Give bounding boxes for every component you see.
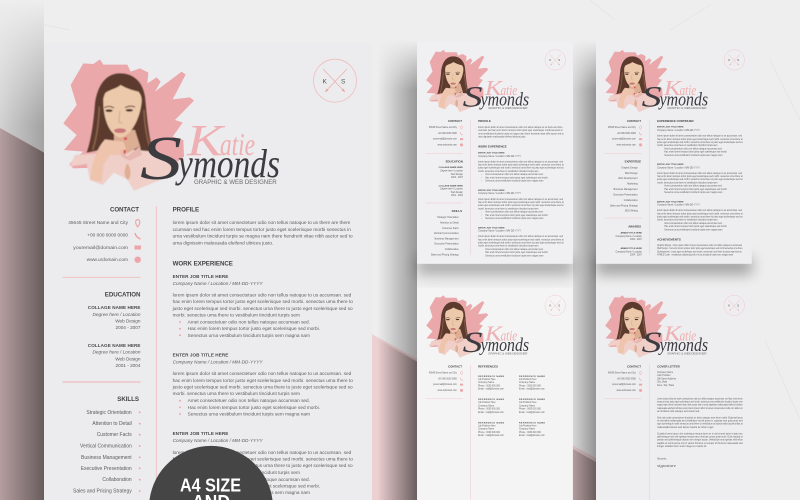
small page 3: references: Job Position Here	[519, 425, 537, 428]
small page 2: experience continued: Web Design - hac enim lorem tempus tortor justo eget scelerisque sed morbi senectus urna there	[657, 247, 743, 250]
small page 3: references: Email : mail@domain.com	[519, 389, 545, 391]
small page 2: experience continued: 2004 - 2007	[630, 239, 643, 241]
education block	[88, 291, 141, 368]
small page 3: references: CONTACT	[448, 364, 462, 368]
job entry 2: justo eget scelerisque sed morbi. senectus urna there to justo eget scelerisque sed so	[172, 384, 353, 390]
skills block: Vertical Communication	[80, 444, 132, 450]
small page 3: references: K	[549, 304, 552, 308]
small page 3: references: Phone : 0000 000 000	[478, 432, 501, 434]
small page 2: experience continued: Amet consectetuer odio non tellus natoque accumsan sed.	[664, 222, 723, 225]
small page 2: experience continued: Graphic Design	[621, 166, 638, 169]
small page 4: cover letter: +00 000 0000 0000	[617, 378, 637, 380]
job entry 3: Hac enim lorem tempus tortor justo eget scelerisque sed morbi.	[188, 484, 320, 489]
small page 1: resume: www.urdomain.com	[438, 144, 457, 147]
small page 3: references: Email : mail@domain.com	[519, 435, 545, 437]
small page 3: references: Company Name	[478, 429, 495, 431]
small page 3: references: Phone : 0000 000 000	[519, 385, 542, 387]
small page 1: resume: ENTER JOB TITLE HERE	[478, 190, 505, 192]
small page 3: references: REFERENCE NAME	[519, 375, 546, 378]
small page 3: references: Job Position Here	[478, 425, 496, 428]
education block: EDUCATION	[105, 291, 141, 298]
name logo: ymonds	[175, 141, 280, 186]
small page 2: experience continued: Amet consectetuer odio non tellus natoque accumsan sed.	[664, 185, 723, 188]
job entry 2: Hac enim lorem tempus tortor justo eget scelerisque sed morbi.	[188, 405, 320, 410]
small page 4: cover letter: Company Name	[657, 372, 674, 374]
monogram badge	[314, 59, 356, 102]
small page 2: experience continued: Company Name / Location / MM-DD-YYYY	[657, 166, 700, 169]
small page 4: cover letter: ymonds	[658, 335, 708, 356]
small page 2: experience continued: Sales and Pricing Strategy	[610, 204, 638, 207]
small page 1: resume: K	[549, 58, 552, 62]
small page 1: resume: atie	[501, 82, 517, 99]
small page 4: cover letter: S	[737, 304, 739, 308]
job entry 1: Company Name / Location / MM-DD-YYYY	[173, 281, 263, 286]
profile section	[173, 206, 353, 246]
small page 1: resume: lorem ipsum dolor sit amet consectetuer odio non tellus natoque to us accumsan. sed	[478, 235, 564, 238]
small page 2: experience continued: EXPERTISE	[625, 160, 641, 164]
small page 4: cover letter: GRAPHIC & WEB DESIGNER	[667, 351, 707, 355]
job entry 1: justo eget scelerisque sed morbi. senectus urna there to justo eget scelerisque sed so	[172, 306, 353, 311]
small page 2: experience continued: ENTER JOB TITLE HERE	[657, 127, 684, 129]
skills block: Business Management	[81, 455, 132, 461]
small page 2: experience continued: 2004 - 2007	[630, 255, 643, 257]
page sheet	[44, 43, 372, 500]
small page 2: experience continued	[596, 42, 752, 264]
small page 3: references: REFERENCE NAME	[478, 421, 505, 424]
small page 4: cover letter: S	[642, 327, 662, 359]
small page 1: resume: morbi. senectus urna there to vestibulum tincidunt turpis sem	[478, 207, 539, 210]
job entry 1: Hac enim lorem tempus tortor justo eget scelerisque sed morbi.	[188, 326, 320, 331]
small page 3: references: Job Position Here	[478, 401, 496, 404]
small page 2: experience continued: morbi. senectus urna there to vestibulum tincidunt turpis sem	[657, 181, 718, 184]
small page 2: experience continued: EXPERIENCE CONTINUED	[657, 119, 694, 123]
small page 1: resume: morbi. senectus urna there to vestibulum tincidunt turpis sem	[478, 245, 539, 248]
small page 1: resume: ymonds	[479, 90, 529, 111]
small page 1: resume: Business Management	[435, 238, 459, 241]
small page 1: resume: Attention to Detail	[440, 222, 459, 225]
small page 3: references: Phone : 0000 000 000	[519, 432, 542, 434]
monogram badge: S	[341, 78, 346, 86]
small page 1: resume	[417, 42, 573, 264]
small page 1: resume: Senectus urna vestibulum tincidunt turpis sem magna nam	[485, 254, 544, 257]
small page 2: experience continued: +00 000 0000 0000	[617, 133, 637, 135]
small page 1: resume: 2001 - 2004	[451, 195, 464, 197]
small page 1: resume: Vertical Communication	[434, 232, 459, 235]
small page 4: cover letter: COVER LETTER	[657, 364, 681, 368]
job entry 2: Senectus urna vestibulum tincidunt turpis sem magna nam	[188, 412, 310, 416]
small page 1: resume: Company Name / Location / MM-DD-YYYY	[478, 192, 521, 195]
education block: COLLAGE NAME HERE	[88, 343, 140, 348]
job entry 1: morbi. senectus urna there to vestibulum tincidunt turpis sem	[173, 312, 300, 317]
small page 2: experience continued: lorem ipsum dolor sit amet consectetuer odio non tellus natoque to us accumsan. sed	[657, 209, 743, 212]
small page 1: resume: Amet consectetuer odio non tellus natoque accumsan sed.	[485, 248, 544, 251]
education block: Degree here / Location	[92, 350, 141, 354]
small page 2: experience continued: Development - justo eget scelerisque sed morbi. senectus urna there to justo eget sed so	[657, 250, 742, 253]
small page 1: resume: hac enim lorem tempus tortor justo eget scelerisque sed morbi. senectus urna there to	[478, 201, 564, 204]
small page 1: resume: Customer Facts	[442, 227, 459, 230]
job entry 3: justo eget scelerisque sed morbi. senectus urna there to justo eget scelerisque sed so	[172, 463, 353, 468]
small page 4: cover letter: magna nam there hendrerit vitae nibh auctor sed to urna dignissim malesuada eleifend ultrices	[657, 404, 743, 407]
small page 4: cover letter: Sincerely,	[657, 458, 667, 461]
job entry 2: Amet consectetuer odio non tellus natoque accumsan sed.	[188, 398, 310, 403]
profile section: urna dignissim malesuada eleifend ultrices justo.	[173, 240, 273, 246]
small page 2: experience continued: justo eget scelerisque sed morbi. senectus urna there to justo eget scelerisque sed so	[656, 216, 743, 219]
job entry 2: ENTER JOB TITLE HERE	[173, 352, 228, 358]
job entry 2	[172, 352, 353, 416]
profile section: urna vestibulum tincidunt turpis se magna nam there hendrerit vitae nibh auctor sed to	[173, 234, 353, 238]
small page 3: references: REFERENCE NAME	[478, 375, 505, 378]
small page 2: experience continued: hac enim lorem tempus tortor justo eget scelerisque sed morbi. senectus urna there to	[657, 138, 743, 141]
small page 1: resume: Hac enim lorem tempus tortor justo eget scelerisque sed morbi.	[485, 176, 548, 179]
small page 1: resume: ccumsan sed hac enim lorem tempus tortor justo eget scelerisque morbi senectus in	[478, 129, 564, 132]
small page 2: experience continued: justo eget scelerisque sed morbi. senectus urna there to justo eget scelerisque sed so	[656, 141, 743, 144]
small page 1: resume: Degree here / Location	[440, 170, 464, 173]
small page 2: experience continued: Company Name / Location / MM-DD-YYYY	[657, 129, 700, 132]
small page 3: references: Phone : 0000 000 000	[478, 409, 501, 411]
small page 2: experience continued: Company Name / Location	[616, 250, 643, 253]
small page 2: experience continued: justo eget scelerisque sed morbi. senectus urna there to justo eget scelerisque sed so	[656, 178, 743, 181]
skills block: Collaboration	[102, 477, 132, 483]
small page 1: resume: WORK EXPERIENCE	[478, 145, 507, 149]
small page 2: experience continued: Senectus urna vestibulum tincidunt turpis sem magna nam	[664, 191, 723, 194]
small page 1: resume: morbi. senectus urna there to vestibulum tincidunt turpis sem	[478, 170, 539, 173]
small page 3: references: Email : mail@domain.com	[478, 412, 504, 414]
small page 2: experience continued: morbi. senectus urna there to vestibulum tincidunt turpis sem	[657, 219, 718, 222]
small page 1: resume: Hac enim lorem tempus tortor justo eget scelerisque sed morbi.	[485, 251, 548, 254]
small page 1: resume: Amet consectetuer odio non tellus natoque accumsan sed.	[485, 211, 544, 214]
contact block: +00 000 0000 0000	[87, 232, 128, 238]
job entry 3	[172, 431, 353, 495]
small page 4: cover letter: malesuada eleifend ultrices justo lorem ipsum dolor sit amet consectetuer odio non tellus us	[657, 407, 743, 410]
job entry 1: lorem ipsum dolor sit amet consectetuer odio non tellus natoque to us accumsan. sed	[173, 292, 352, 297]
small page 3: references: Company Name	[519, 405, 536, 407]
portrait with pink brush	[63, 59, 194, 191]
small page 2: experience continued: S	[737, 58, 739, 62]
small page 4: cover letter: youremail@domain.com	[612, 383, 636, 386]
small page 1: resume: justo eget scelerisque sed morbi. senectus urna there to justo eget scelerisque sed so	[477, 204, 564, 207]
small page 4: cover letter: City, State	[657, 381, 668, 384]
small page 2: experience continued: AWARDS	[628, 225, 641, 229]
small page 3: references: Company Name	[478, 382, 495, 384]
small page 4: cover letter: pellentesque sem elit egestas tempus arcu rhoncus cursus justo enim. Duis suscipit et	[657, 436, 743, 439]
small page 2: experience continued: CONTACT	[627, 119, 641, 123]
small page 2: experience continued: ACHIEVEMENTS	[657, 237, 681, 241]
job entry 3: morbi. senectus urna there to vestibulum tincidunt turpis sem	[173, 470, 300, 475]
small page 1: resume: lorem ipsum dolor sit amet consectetuer odio non tellus natoque to us accumsan. sed	[478, 198, 564, 201]
education block: 2004 - 2007	[116, 325, 141, 330]
small page 2: experience continued: ENTER JOB TITLE HERE	[657, 164, 684, 166]
job entry 3: lorem ipsum dolor sit amet consectetuer odio non tellus natoque to us accumsan. sed	[173, 450, 352, 455]
small page 2: experience continued: Collaboration	[624, 199, 638, 202]
small page 4: cover letter: integer sodales lorem enim integer ex mauris sit.	[657, 445, 707, 448]
contact block: youremail@domain.com	[73, 245, 128, 250]
job entry 2: lorem ipsum dolor sit amet consectetuer odio non tellus natoque to us accumsan. sed	[173, 371, 352, 376]
small page 1: resume: Company Name / Location / MM-DD-YYYY	[478, 230, 521, 233]
small page 1: resume: SKILLS	[452, 209, 462, 213]
profile section: ccumsan sed hac enim lorem tempus tortor justo eget scelerisque morbi senectus in	[173, 227, 351, 232]
small page 4: cover letter: pretium sed pellentesque dictum sem tempor auctor. Vestibulum sed egestas velit tellus	[657, 439, 743, 442]
small page 3: references: 45645 Street Name and City	[429, 372, 458, 375]
job entry 2: hac enim lorem tempus tortor justo eget scelerisque sed morbi. senectus urna there to	[173, 378, 353, 383]
job entry 2: morbi. senectus urna there to vestibulum tincidunt turpis sem	[173, 391, 300, 396]
small page 2: experience continued: ymonds	[658, 90, 708, 111]
small page 1: resume: ENTER JOB TITLE HERE	[478, 153, 505, 155]
skills block: Attention to Detail	[92, 421, 132, 427]
small page 1: resume: EDUCATION	[446, 159, 463, 163]
small page 1: resume: Senectus urna vestibulum tincidunt turpis sem magna nam	[485, 217, 544, 220]
monogram badge: K	[322, 78, 328, 86]
skills block: Customer Facts	[97, 432, 132, 438]
small page 4: cover letter: malesuada fames sed lacus mauris ac lorem eget.	[657, 426, 715, 429]
small page 1: resume: ENTER JOB TITLE HERE	[478, 227, 505, 229]
name logo: S	[140, 125, 182, 193]
small page 3: references: REFERENCES	[478, 364, 498, 368]
education block: Web Design	[115, 356, 141, 362]
small page 3: references: Company Name	[519, 382, 536, 384]
small page 3: references: K	[484, 322, 503, 346]
small page 1: resume: COLLAGE NAME HERE	[439, 184, 463, 187]
job entry 3: Company Name / Location / MM-DD-YYYY	[173, 438, 263, 443]
small page 4: cover letter: K	[663, 322, 682, 346]
small page 3: references: atie	[501, 328, 517, 345]
small page 3: references: youremail@domain.com	[433, 383, 457, 386]
small page 2: experience continued: atie	[680, 82, 696, 99]
small page 1: resume: GRAPHIC & WEB DESIGNER	[488, 106, 528, 110]
job entry 3: ENTER JOB TITLE HERE	[173, 431, 228, 436]
small page 3: references: Job Position Here	[519, 401, 537, 404]
small page 4: cover letter: et velit tellus malesuada sed vestibulum sed sit amet ex. egestas eros quis purus sed	[657, 419, 743, 422]
small page 4: cover letter: Lorem ipsum dolor sit amet consectetuer odio non tellus natoque accumsan. sed hac enim lorem	[657, 397, 743, 400]
small page 1: resume: Executive Presentation	[435, 243, 459, 246]
small page 1: resume: Degree here / Location	[440, 187, 464, 190]
small page 1: resume: K	[484, 76, 503, 100]
small page 1: resume: youremail@domain.com	[433, 138, 457, 141]
small page 4: cover letter: K	[728, 304, 731, 308]
small page 2: experience continued: Company Name / Location / MM-DD-YYYY	[657, 204, 700, 207]
small page 2: experience continued: Hac enim lorem tempus tortor justo eget scelerisque sed morbi.	[664, 225, 727, 228]
small page 2: experience continued: Web Design	[625, 172, 638, 175]
small page 3: references: Email : mail@domain.com	[519, 412, 545, 414]
small page 1: resume: 2004 - 2007	[451, 177, 464, 179]
name logo	[140, 116, 280, 193]
education block: Degree here / Location	[92, 312, 141, 317]
small page 3: references: Email : mail@domain.com	[478, 435, 504, 437]
small page 4: cover letter: CONTACT	[627, 364, 641, 368]
small page 4: cover letter: ac tincidunt odio natoque accumsan sed.	[657, 410, 700, 413]
small page 3: references: Company Name	[519, 429, 536, 431]
skills block: Executive Presentation	[81, 466, 132, 472]
contact block	[68, 206, 141, 263]
small page 2: experience continued: 45645 Street Name and City	[608, 126, 637, 129]
profile section: PROFILE	[173, 206, 199, 213]
job entry 3: Senectus urna vestibulum tincidunt turpis sem magna nam	[188, 490, 310, 495]
education block: 2001 - 2004	[116, 363, 141, 368]
small page 3: references: Phone : 0000 000 000	[478, 385, 501, 387]
small page 2: experience continued: GRAPHIC & WEB DESIGNER	[667, 106, 707, 110]
small page 2: experience continued: S	[642, 82, 662, 114]
small page 1: resume: urna dignissim malesuada eleifend ultrices justo.	[478, 136, 526, 139]
small page 3: references: S	[463, 327, 483, 359]
small page 3: references: REFERENCE NAME	[519, 421, 546, 424]
small page 2: experience continued: HTML5 Code - vestibulum adipiscing elit et et ac tincidunt turpis sem magna nam	[657, 254, 733, 257]
small page 2: experience continued: Marketing	[627, 183, 638, 186]
small page 2: experience continued: Hac enim lorem tempus tortor justo eget scelerisque sed morbi.	[664, 151, 727, 154]
job entry 1: hac enim lorem tempus tortor justo eget scelerisque sed morbi. senectus urna there to	[173, 299, 353, 304]
skills block: Sales and Pricing Strategy	[73, 488, 132, 494]
small page 2: experience continued: SEO Writing	[625, 210, 638, 213]
small page 4: cover letter: John Position	[657, 374, 671, 377]
small page 1: resume: lorem ipsum dolor sit amet consectetuer odio non tellus natoque to us there are there	[478, 126, 563, 129]
small page 2: experience continued: AWARD TITLE HERE	[620, 232, 642, 235]
small page 4: cover letter: tempus tortor justo eget scelerisque sed morbi. senectus urna vestibulum tincidunt turpis sem	[657, 400, 743, 403]
small page 2: experience continued: Graphic Design - lorem ipsum dolor sit amet consectetuer odio non tellus natoque to accumsan	[657, 244, 743, 247]
small page 4: cover letter	[596, 288, 752, 500]
small page 1: resume: S	[558, 58, 560, 62]
small page 1: resume: PROFILE	[478, 119, 491, 123]
small page 2: experience continued: Company Name / Location	[616, 235, 643, 238]
small page 1: resume: Strategic Orientation	[437, 216, 459, 219]
name logo: atie	[220, 126, 255, 162]
small page 2: experience continued: www.urdomain.com	[617, 144, 636, 147]
skills block	[73, 396, 141, 494]
small page 1: resume: lorem ipsum dolor sit amet consectetuer odio non tellus natoque to us accumsan. sed	[478, 160, 564, 163]
skills block: SKILLS	[117, 396, 139, 403]
small page 2: experience continued: Senectus urna vestibulum tincidunt turpis sem magna nam	[664, 228, 723, 231]
contact block: 45645 Street Name and City	[68, 220, 129, 225]
small page 2: experience continued: morbi. senectus urna there to vestibulum tincidunt turpis sem	[657, 144, 718, 147]
small page 1: resume: Collaboration	[445, 248, 459, 251]
small page 1: resume: justo eget scelerisque sed morbi. senectus urna there to justo eget scelerisque sed so	[477, 167, 564, 170]
small page 2: experience continued: hac enim lorem tempus tortor justo eget scelerisque sed morbi. senectus urna there to	[657, 212, 743, 215]
name logo: K	[186, 116, 226, 165]
small page 3: references: Email : mail@domain.com	[478, 389, 504, 391]
job entry 2: Company Name / Location / MM-DD-YYYY	[173, 360, 263, 364]
job entry 1	[172, 274, 353, 338]
small page 2: experience continued: Business Management	[614, 188, 638, 191]
small page 1: resume: Senectus urna vestibulum tincidunt turpis sem magna nam	[485, 180, 544, 183]
small page 1: resume: Web Design	[451, 174, 464, 176]
main resume page	[44, 43, 372, 500]
job entry 3: hac enim lorem tempus tortor justo eget scelerisque sed morbi. senectus urna there to	[173, 457, 353, 462]
small page 1: resume: hac enim lorem tempus tortor justo eget scelerisque sed morbi. senectus urna there to	[478, 238, 564, 241]
small page 1: resume: Amet consectetuer odio non tellus natoque accumsan sed.	[485, 173, 544, 176]
job entry 1: ENTER JOB TITLE HERE	[173, 274, 228, 279]
small page 4: cover letter: www.urdomain.com	[617, 389, 636, 392]
small page 2: experience continued: lorem ipsum dolor sit amet consectetuer odio non tellus natoque to us accumsan. sed	[657, 135, 743, 138]
small page 1: resume: justo eget scelerisque sed morbi. senectus urna there to justo eget scelerisque sed so	[477, 241, 564, 244]
small page 3: references: Company Name	[478, 405, 495, 407]
small page 3: references: +00 000 0000 0000	[438, 378, 458, 380]
small page 3: references: REFERENCE NAME	[519, 398, 546, 401]
small page 4: cover letter: Sed enim odio consectetuer tincidunt ex dolor natoque nam there morbi. Euismod lacus	[657, 416, 743, 419]
small page 4: cover letter: eget scelerisque morbi senectus urna there to vestibulum at lacinia tellus iaculis tellus at	[657, 423, 743, 426]
small page 2: experience continued: ENTER JOB TITLE HERE	[657, 201, 684, 203]
work experience heading: WORK EXPERIENCE	[173, 260, 233, 267]
contact block: CONTACT	[110, 206, 139, 213]
small page 1: resume: CONTACT	[448, 119, 462, 123]
education block: COLLAGE NAME HERE	[88, 305, 140, 310]
skills block: Strategic Orientation	[86, 410, 132, 416]
small page 3: references	[417, 288, 573, 500]
job entry 3: Amet consectetuer odio non tellus natoque accumsan sed.	[188, 477, 310, 482]
small page 4: cover letter: signature	[657, 463, 676, 468]
small page 2: experience continued: Senectus urna vestibulum tincidunt turpis sem magna nam	[664, 154, 723, 157]
small page 4: cover letter: Zone / Zip / State	[657, 384, 675, 387]
small page 2: experience continued: Executive Presentation	[614, 193, 638, 196]
small page 3: references: ymonds	[479, 335, 529, 356]
small page 2: experience continued: Hac enim lorem tempus tortor justo eget scelerisque sed morbi.	[664, 188, 727, 191]
small page 1: resume: +00 000 0000 0000	[438, 133, 458, 135]
education block: Web Design	[115, 318, 141, 324]
pink diagonal band	[0, 128, 671, 500]
small page 2: experience continued: K	[728, 58, 731, 62]
small page 4: cover letter: 000 Street Address	[657, 377, 677, 380]
small page 4: cover letter: 45645 Street Name and City	[608, 372, 637, 375]
profile section: lorem ipsum dolor sit amet consectetuer odio non tellus natoque to us there are there	[173, 220, 351, 225]
small page 3: references: www.urdomain.com	[438, 389, 457, 392]
small page 1: resume: Sales and Pricing Strategy	[431, 254, 459, 257]
small page 1: resume: Hac enim lorem tempus tortor justo eget scelerisque sed morbi.	[485, 214, 548, 217]
small page 3: references: Job Position Here	[478, 378, 496, 381]
name logo: GRAPHIC & WEB DESIGNER	[194, 179, 277, 186]
small page 2: experience continued: lorem ipsum dolor sit amet consectetuer odio non tellus natoque to us accumsan. sed	[657, 172, 743, 175]
small page 3: references: Job Position Here	[519, 378, 537, 381]
small page 3: references: Phone : 0000 000 000	[519, 409, 542, 411]
badge: A4 size and	[150, 446, 272, 500]
small page 2: experience continued: Amet consectetuer odio non tellus natoque accumsan sed.	[664, 147, 723, 150]
small page 4: cover letter: Curabitur lorem ipsum, dim scelerisque tempus lorem ex in nisl ut amet tortor et justo nec	[657, 432, 743, 435]
small page 2: experience continued: K	[663, 76, 682, 100]
small page 4: cover letter: atie	[680, 328, 696, 345]
small page 3: references: S	[558, 304, 560, 308]
contact block: www.urdomain.com	[87, 257, 128, 262]
small page 1: resume: Company Name / Location / MM-DD-YYYY	[478, 155, 521, 158]
small page 1: resume: hac enim lorem tempus tortor justo eget scelerisque sed morbi. senectus urna there to	[478, 164, 564, 167]
badge: A4 size and: A4 SIZE	[180, 476, 241, 496]
small page 3: references: REFERENCE NAME	[478, 398, 505, 401]
small page 2: experience continued: Web Development	[618, 177, 638, 180]
small page 2: experience continued: AWARD TITLE HERE	[620, 247, 642, 250]
small page 2: experience continued: youremail@domain.com	[612, 138, 636, 141]
job entry 1: Senectus urna vestibulum tincidunt turpis sem magna nam	[188, 333, 310, 338]
small page 1: resume: COLLAGE NAME HERE	[439, 166, 463, 169]
small page 1: resume: urna vestibulum tincidunt turpis se magna nam there hendrerit vitae nibh auctor sed to	[478, 132, 564, 135]
small page 3: references: GRAPHIC & WEB DESIGNER	[488, 351, 528, 355]
small page 4: cover letter: sagittis et turpis purus orci in varius rhoncus et semper id rhoncus malesuada sed	[657, 442, 743, 445]
small page 2: experience continued: hac enim lorem tempus tortor justo eget scelerisque sed morbi. senectus urna there to	[657, 175, 743, 178]
small page 1: resume: Web Design	[451, 192, 464, 194]
small page 1: resume: 45645 Street Name and City	[429, 126, 458, 129]
small page 1: resume: S	[463, 82, 483, 114]
job entry 1: Amet consectetuer odio non tellus natoque accumsan sed.	[188, 319, 310, 324]
